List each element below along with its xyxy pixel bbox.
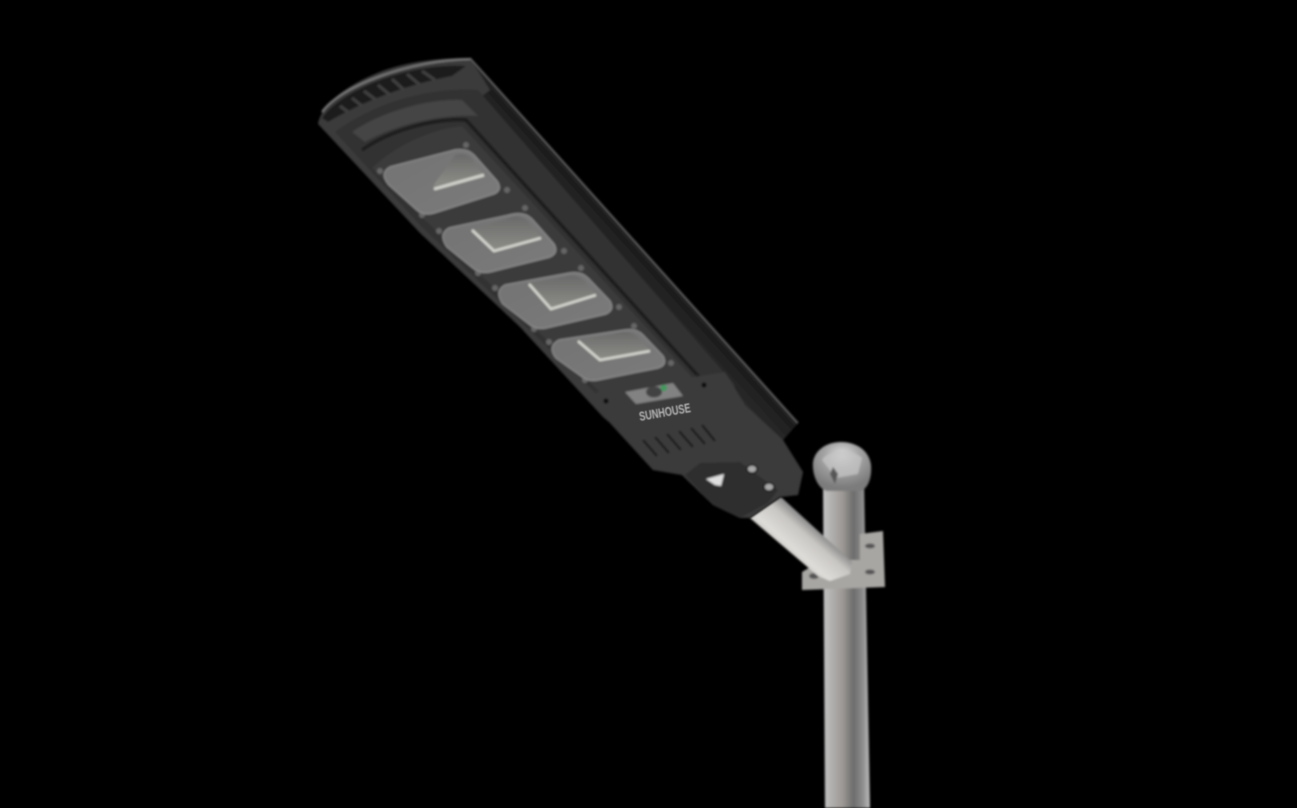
finned top edge — [322, 66, 466, 122]
housing outer body — [318, 58, 803, 518]
lower control section — [596, 372, 803, 518]
LED module 2 — [436, 205, 567, 276]
LED module 4 — [546, 323, 674, 383]
screws — [603, 398, 609, 404]
mount bolts — [747, 465, 757, 473]
fin edge highlight — [322, 59, 470, 112]
vent slots — [643, 425, 715, 456]
inner groove — [362, 120, 700, 378]
inner tray — [372, 126, 705, 402]
status LED — [661, 385, 667, 391]
right edge highlight — [470, 58, 798, 423]
pole cap ball — [813, 442, 871, 491]
fins — [340, 71, 435, 112]
pole and bracket — [750, 442, 885, 808]
front recessed rim — [335, 90, 735, 405]
sensor lens — [646, 386, 662, 398]
right side face — [470, 58, 798, 445]
inner raised band — [352, 100, 478, 142]
clamp bolts — [809, 544, 875, 579]
LED module 1 — [377, 142, 510, 218]
cap notch — [830, 467, 838, 484]
mount plate — [685, 462, 778, 518]
mount highlight — [706, 474, 724, 486]
cap highlight — [822, 451, 862, 478]
pole shaft — [823, 480, 870, 808]
clamp plate — [802, 531, 885, 590]
LED module 3 — [492, 265, 622, 332]
brand label: SUNHOUSE — [638, 401, 692, 424]
lamp housing — [318, 58, 803, 518]
sensor plate — [625, 383, 683, 404]
mounting arm — [750, 497, 852, 581]
